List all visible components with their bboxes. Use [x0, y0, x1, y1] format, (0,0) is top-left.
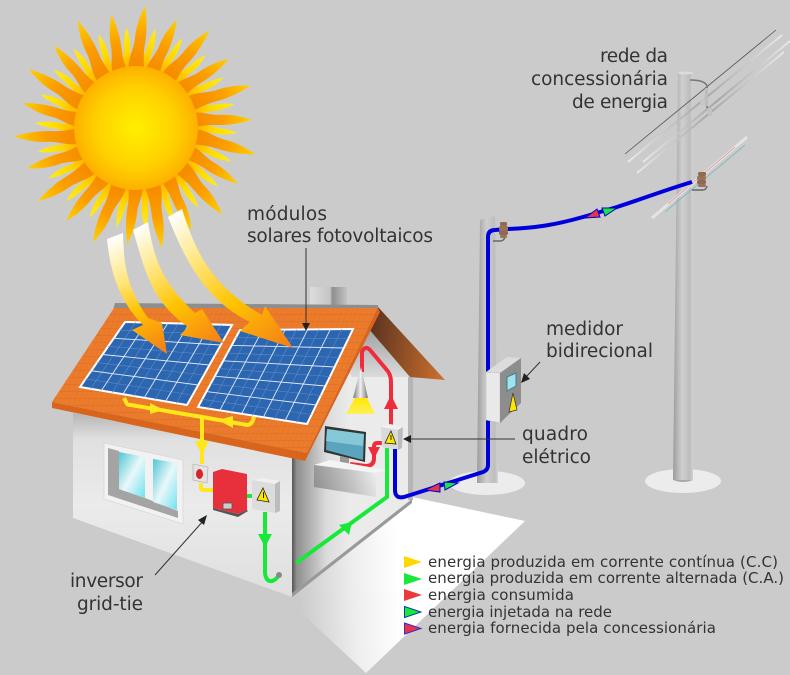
arrow: electrical panel	[403, 435, 515, 443]
sunlight arrow 1	[107, 233, 167, 354]
electrical panel	[381, 424, 403, 450]
gable shadow	[345, 328, 412, 377]
pole base: left	[449, 471, 525, 495]
roof ridge	[113, 303, 378, 310]
label: rede da concessionaria de energia	[531, 46, 668, 113]
solar panel: left	[80, 322, 232, 405]
red consumption wires	[350, 348, 398, 466]
chimney	[310, 287, 347, 307]
sun	[14, 6, 258, 248]
pole base: right	[645, 469, 721, 493]
blue cable: utility to house	[395, 182, 692, 497]
bidirectional meter	[486, 357, 521, 423]
label: inversor grid-tie: grid-tie	[77, 594, 143, 615]
wall: right	[292, 328, 412, 597]
sunlight arrow 2	[133, 222, 224, 343]
label: inversor grid-tie	[70, 571, 143, 615]
ground shadow: white floor area	[292, 497, 525, 673]
wall: front	[73, 413, 292, 597]
house	[52, 287, 445, 597]
label: medidor bidirecional	[546, 319, 653, 362]
legend item: injected: energia injetada na rede	[428, 603, 612, 621]
yellow DC wires	[124, 398, 254, 490]
label: medidor bidirecional: medidor	[546, 319, 623, 340]
label: quadro eletrico: quadro	[522, 424, 588, 445]
label: modulos solares fotovoltaicos: solares fotovoltaicos	[247, 226, 433, 247]
utility pole: left	[477, 216, 498, 483]
wall base shade	[292, 499, 412, 597]
sun disc	[74, 66, 198, 190]
insulator: left pole	[493, 222, 508, 241]
window	[104, 443, 183, 524]
label: rede da concessionaria de energia: concessionária	[531, 69, 668, 90]
legend item: consumed: energia consumida	[428, 586, 574, 604]
label: quadro eletrico	[522, 424, 591, 468]
roof edge	[52, 308, 380, 461]
roof	[52, 308, 378, 453]
DC switch	[193, 464, 208, 483]
sun rays	[14, 6, 258, 248]
arrow: modules	[302, 248, 310, 331]
monitor	[324, 426, 366, 470]
AC breaker box	[247, 478, 280, 513]
label: quadro eletrico: elétrico	[522, 447, 591, 468]
desk	[314, 460, 386, 497]
insulator: right pole	[692, 172, 707, 190]
legend item: AC: energia produzida em corrente alternada (C.A.)	[428, 569, 784, 587]
green AC wires	[258, 448, 387, 581]
legend	[404, 553, 784, 637]
utility pole: right	[673, 72, 693, 482]
label: rede da concessionaria de energia: rede da	[600, 46, 668, 67]
ceiling lamp	[346, 367, 375, 414]
legend item: supplied: energia fornecida pela concessionária	[428, 619, 716, 637]
label: modulos solares fotovoltaicos: módulos	[247, 204, 327, 225]
service drop wires	[652, 137, 747, 218]
utility grid wires	[625, 30, 790, 173]
label: medidor bidirecional: bidirecional	[546, 341, 653, 362]
label: inversor grid-tie: inversor	[70, 571, 143, 592]
arrow: inverter	[155, 515, 207, 575]
legend item: DC: energia produzida em corrente contínua (C.C)	[428, 553, 778, 571]
grid-tie inverter	[213, 469, 248, 517]
sunlight arrow 3	[168, 209, 293, 348]
solar panel: right	[198, 329, 353, 424]
flow arrows on overhead cable	[585, 208, 617, 218]
label: modulos solares fotovoltaicos	[247, 204, 433, 247]
label: rede da concessionaria de energia: de energia	[572, 92, 668, 113]
flow arrows on lower cable	[425, 482, 458, 492]
roof underside	[368, 307, 445, 380]
arrow: meter	[521, 362, 540, 383]
